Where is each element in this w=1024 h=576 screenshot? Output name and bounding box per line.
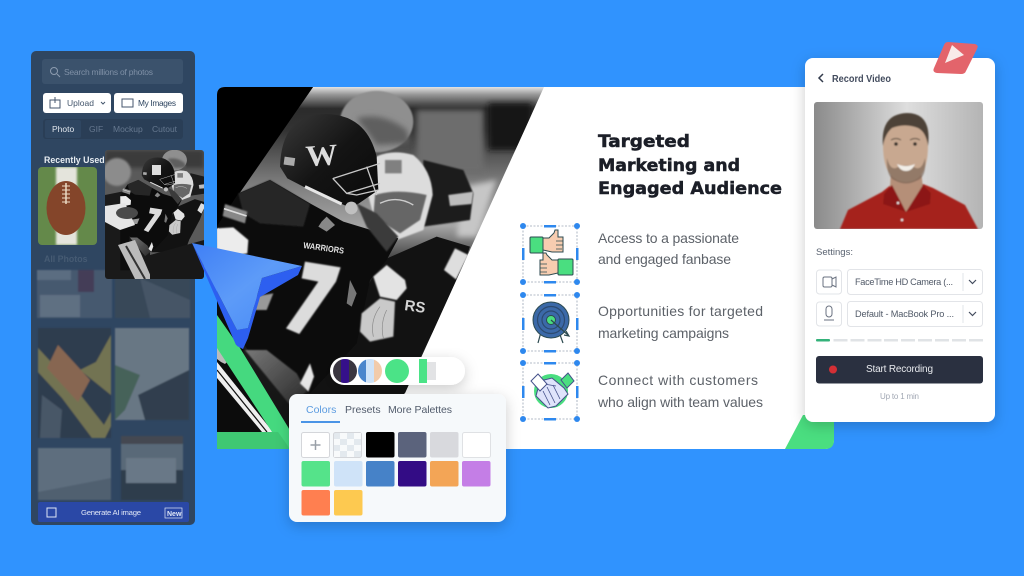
text: settings: Settings: <box>816 247 853 258</box>
photo: smiling man <box>814 102 983 229</box>
heading: recently used: Recently Used <box>44 155 105 165</box>
swatch: white <box>437 358 463 384</box>
heading: all photos: All Photos <box>44 254 88 264</box>
swatch: green and grey <box>419 359 436 383</box>
text block: benefits: Opportunities for targeted <box>598 303 763 319</box>
button: generate AI image <box>38 502 189 522</box>
my images button <box>114 93 183 113</box>
tabs: More Palettes <box>388 404 452 416</box>
panel: main slide card: WARRIORS <box>303 240 345 256</box>
swatch: dark purple <box>333 359 357 383</box>
title <box>598 132 782 199</box>
button: generate AI image: New <box>167 511 182 518</box>
button: start recording <box>816 356 983 384</box>
swatch: green <box>385 359 409 383</box>
progress segments <box>816 339 983 342</box>
photo: football players <box>210 87 550 453</box>
icon: 3D cursor arrow <box>192 243 302 349</box>
search box <box>42 59 183 84</box>
upload button <box>43 93 111 113</box>
heading: record video: Record Video <box>832 74 891 85</box>
photo: dragged football thumbnail <box>103 150 207 279</box>
title: Targeted <box>598 132 690 152</box>
title: Engaged Audience <box>598 179 782 199</box>
media tabs: Mockup <box>113 124 143 134</box>
tabs: Colors <box>306 404 336 416</box>
text block: benefits <box>597 230 763 410</box>
media tabs: Photo <box>52 124 74 134</box>
text block: benefits: who align with team values <box>597 394 763 410</box>
button: start recording: Start Recording <box>866 364 933 375</box>
search box: Search millions of photos <box>64 67 153 77</box>
photo: football on grass <box>38 167 97 245</box>
media tabs: GIF <box>89 124 103 134</box>
microphone control: Default - MacBook Pro ... <box>855 309 954 319</box>
icon: handshake in selection box <box>520 360 580 422</box>
swatch grid <box>302 432 490 516</box>
panel: main slide card: RS <box>403 297 426 317</box>
panel: record video <box>805 42 995 422</box>
tabs <box>301 404 452 423</box>
text: up to 1 min: Up to 1 min <box>880 392 919 401</box>
upload button: Upload <box>67 98 94 108</box>
back chevron <box>819 74 823 82</box>
text block: benefits: marketing campaigns <box>598 325 729 341</box>
camera control <box>816 270 982 294</box>
thumbnails: dimmed photo grid <box>37 270 190 500</box>
green diagonal band <box>217 315 289 448</box>
icon: target in selection box <box>520 292 580 354</box>
camera control: FaceTime HD Camera (... <box>855 277 953 287</box>
media tabs <box>43 119 183 139</box>
tabs: Presets <box>345 404 381 416</box>
text block: benefits: Access to a passionate <box>598 230 739 246</box>
text block: benefits: Connect with customers <box>598 372 758 388</box>
microphone control <box>816 302 982 326</box>
black lower-left stripes <box>217 348 273 432</box>
my images button: My Images <box>138 98 176 108</box>
panel: colors picker <box>289 394 506 522</box>
text block: benefits: and engaged fanbase <box>598 251 731 267</box>
panel: main slide card <box>210 87 834 453</box>
title: Marketing and <box>598 156 740 176</box>
palette selector pill <box>330 357 465 385</box>
swatch: blues and peach <box>358 359 382 383</box>
panel: main slide card: W <box>305 138 339 173</box>
icon: thumbs up in selection box <box>520 223 580 285</box>
media tabs: Cutout <box>152 124 178 134</box>
icon: play badge <box>933 42 978 74</box>
button: generate AI image: Generate AI image <box>81 508 141 517</box>
green corner accent <box>785 415 834 449</box>
panel: photo library sidebar <box>31 51 195 525</box>
